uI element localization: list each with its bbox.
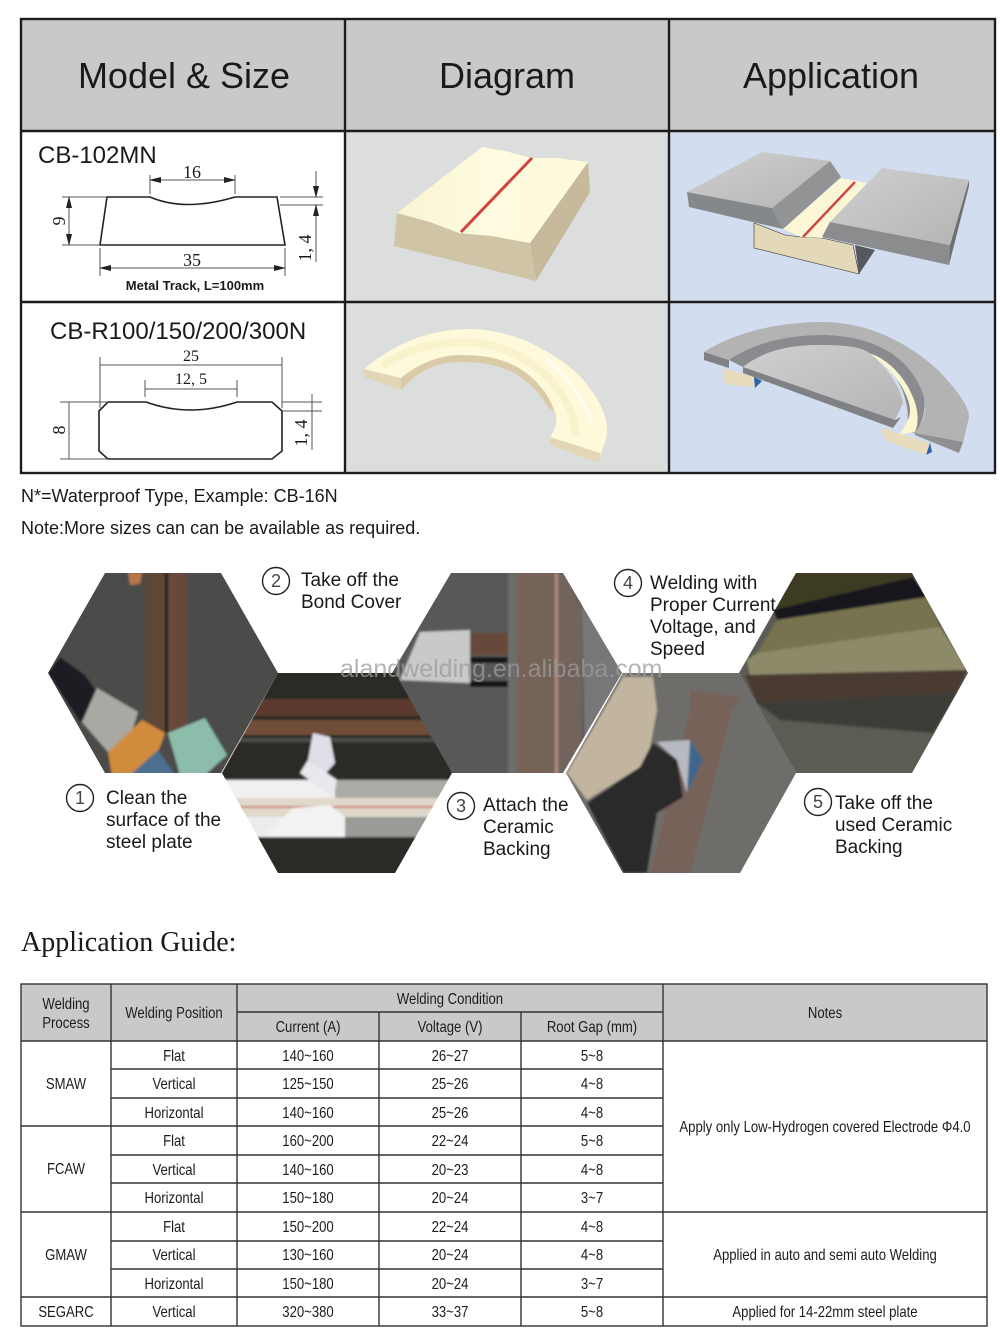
- step 5 label: Take off the: [835, 793, 933, 814]
- column: current: [276, 1019, 340, 1321]
- step 3 label: Backing: [483, 839, 551, 860]
- column: root gap: 4~8: [581, 1162, 603, 1179]
- column: welding process: SEGARC: [38, 1304, 94, 1321]
- step 1 label: 1: [75, 788, 85, 808]
- column: welding process: Welding: [42, 996, 90, 1013]
- column: voltage: 26~27: [432, 1048, 468, 1065]
- table grid: [21, 19, 995, 473]
- size drawing: CB-R profile: 12, 5: [175, 371, 207, 388]
- column: notes: Applied in auto and semi auto Welding: [713, 1247, 937, 1264]
- column: welding position: Welding Position: [125, 1005, 223, 1022]
- column: root gap: 5~8: [581, 1048, 603, 1065]
- column: voltage: 20~24: [432, 1247, 468, 1264]
- column: welding position: [125, 1005, 223, 1321]
- size drawing: CB-R profile: 1, 4: [291, 420, 311, 446]
- heading: Model & Size: Model & Size: [78, 55, 290, 96]
- diagram: straight ceramic block: [394, 147, 590, 281]
- column: welding process: FCAW: [47, 1161, 85, 1178]
- step 2 label: Take off the: [301, 570, 399, 591]
- column: root gap: 5~8: [581, 1304, 603, 1321]
- step 2 label: 2: [271, 571, 281, 591]
- step 4 label: Voltage, and: [650, 617, 756, 638]
- column: current: 140~160: [282, 1162, 334, 1179]
- diagram cell backgrounds: [345, 131, 669, 473]
- application guide table: [21, 984, 987, 1326]
- column: notes: Apply only Low-Hydrogen covered Electrode Φ4.0: [679, 1119, 971, 1136]
- step 4 label: Welding with: [650, 573, 757, 594]
- step 2 label: Bond Cover: [301, 592, 402, 613]
- step 2 label: [262, 568, 402, 613]
- column: notes: Applied for 14-22mm steel plate: [732, 1304, 918, 1321]
- column: current: 320~380: [282, 1304, 334, 1321]
- column: welding position: Vertical: [152, 1247, 196, 1264]
- step 4 label: Speed: [650, 639, 705, 660]
- column: welding position: Vertical: [152, 1162, 196, 1179]
- step 1 label: steel plate: [106, 832, 193, 853]
- size drawing: CB-102MN profile: 9: [49, 216, 69, 226]
- heading: Diagram: Diagram: [439, 55, 575, 96]
- product table: [21, 19, 995, 473]
- column: root gap: 3~7: [581, 1276, 603, 1293]
- note: more sizes: Note:More sizes can can be available as required.: [21, 518, 420, 538]
- heading: Application: Application: [743, 55, 919, 96]
- size drawing: CB-102MN profile: Metal Track, L=100mm: [126, 278, 264, 293]
- step 4 label: Proper Current: [650, 595, 776, 616]
- header: welding condition: Welding Condition: [397, 991, 503, 1008]
- step 3 label: 3: [456, 796, 466, 816]
- column: current: 125~150: [282, 1076, 334, 1093]
- photo 5: take off the used backing: [739, 573, 968, 773]
- column: current: 160~200: [282, 1133, 334, 1150]
- heading: Application Guide: Application Guide:: [21, 927, 236, 958]
- column: welding process: Process: [42, 1015, 90, 1032]
- size drawing: CB-102MN profile: 16: [183, 162, 201, 182]
- header row background: [21, 19, 995, 131]
- photo 4: welding: [566, 673, 796, 873]
- process steps photos: [40, 565, 975, 880]
- column: welding process: SMAW: [46, 1076, 86, 1093]
- column: welding position: Vertical: [152, 1304, 196, 1321]
- size drawing: CB-R profile: 25: [183, 348, 199, 365]
- step 5 label: [804, 788, 952, 858]
- step 5 label: Backing: [835, 837, 903, 858]
- step 3 label: Ceramic: [483, 817, 554, 838]
- step 4 label: [614, 570, 776, 660]
- column: root gap: 4~8: [581, 1076, 603, 1093]
- model label: CB-R100/150/200/300N: CB-R100/150/200/300N: [50, 318, 306, 345]
- column: voltage: 22~24: [432, 1133, 468, 1150]
- step 5 label: 5: [813, 792, 823, 812]
- model label: CB-102MN: CB-102MN: [38, 142, 157, 169]
- photo 2: take off the bond cover: [222, 673, 452, 873]
- step 1 label: surface of the: [106, 810, 221, 831]
- step 1 label: [66, 784, 221, 853]
- application cell backgrounds: [669, 131, 995, 473]
- column: notes: Notes: [808, 1005, 842, 1022]
- column: current: 130~160: [282, 1247, 334, 1264]
- column: welding position: Flat: [163, 1133, 185, 1150]
- step 3 label: [448, 792, 569, 860]
- column: voltage: 22~24: [432, 1219, 468, 1236]
- column: voltage: Voltage (V): [418, 1019, 482, 1036]
- column: current: 140~160: [282, 1105, 334, 1122]
- column: voltage: 20~24: [432, 1276, 468, 1293]
- size drawing: CB-102MN profile: [49, 162, 323, 293]
- column: root gap: 5~8: [581, 1133, 603, 1150]
- column: root gap: 4~8: [581, 1105, 603, 1122]
- application: curved block under plates: [704, 322, 969, 455]
- column: welding process: [38, 996, 94, 1321]
- column: welding position: Horizontal: [144, 1105, 204, 1122]
- size drawing: CB-R profile: [49, 348, 322, 459]
- note: waterproof type: N*=Waterproof Type, Example: CB-16N: [21, 486, 338, 506]
- watermark: alandwelding.en.alibaba.com: [340, 655, 662, 683]
- size drawing: CB-102MN profile: 35: [183, 250, 201, 270]
- column: welding position: Horizontal: [144, 1190, 204, 1207]
- column: current: 150~180: [282, 1276, 334, 1293]
- size drawing: CB-102MN profile: 1, 4: [295, 234, 315, 262]
- column: voltage: [418, 1019, 482, 1321]
- column: welding position: Vertical: [152, 1076, 196, 1093]
- column: current: Current (A): [276, 1019, 340, 1036]
- diagram: curved ceramic block: [364, 329, 607, 463]
- column: root gap: 3~7: [581, 1190, 603, 1207]
- column: current: 150~180: [282, 1190, 334, 1207]
- column: current: 140~160: [282, 1048, 334, 1065]
- column: voltage: 20~23: [432, 1162, 468, 1179]
- column: welding position: Horizontal: [144, 1276, 204, 1293]
- column: voltage: 25~26: [432, 1076, 468, 1093]
- step 4 label: 4: [623, 573, 633, 593]
- column: root gap: Root Gap (mm): [547, 1019, 637, 1036]
- column: root gap: [547, 1019, 637, 1321]
- photo 3: attach the ceramic backing: [392, 573, 622, 773]
- column: root gap: 4~8: [581, 1247, 603, 1264]
- application: straight block under plates: [687, 152, 969, 274]
- column: welding position: Flat: [163, 1048, 185, 1065]
- size drawing: CB-R profile: 8: [49, 426, 69, 434]
- column: notes: [679, 1005, 971, 1321]
- photo 1: clean the surface: [48, 573, 278, 773]
- grid: [21, 984, 987, 1326]
- column: current: 150~200: [282, 1219, 334, 1236]
- column: welding position: Flat: [163, 1219, 185, 1236]
- header background: [21, 984, 987, 1041]
- column: welding process: GMAW: [45, 1247, 87, 1264]
- step 5 label: used Ceramic: [835, 815, 952, 836]
- column: voltage: 25~26: [432, 1105, 468, 1122]
- step 3 label: Attach the: [483, 795, 569, 816]
- column: voltage: 33~37: [432, 1304, 468, 1321]
- step 1 label: Clean the: [106, 788, 187, 809]
- column: voltage: 20~24: [432, 1190, 468, 1207]
- column: root gap: 4~8: [581, 1219, 603, 1236]
